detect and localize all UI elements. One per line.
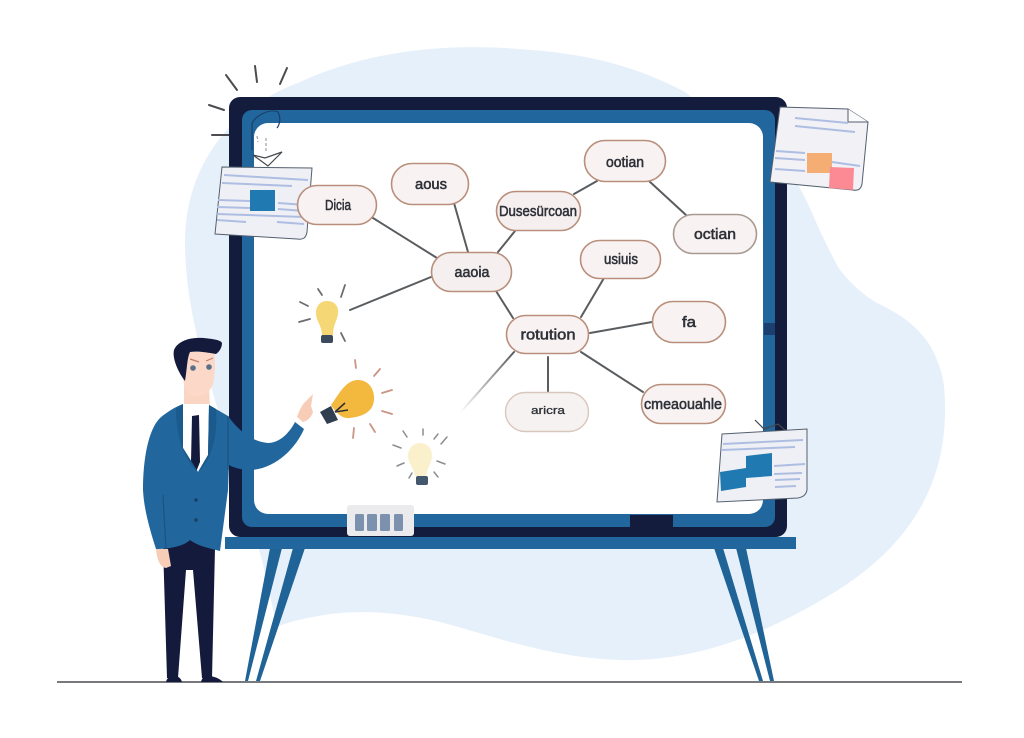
connector lines: [350, 181, 686, 413]
node: Data: Dicia: [325, 197, 352, 214]
node: middle upper: [496, 192, 580, 230]
node: Data: [298, 186, 376, 224]
icon: pale bulb: [393, 429, 447, 485]
tie: [191, 415, 200, 472]
whiteboard frame: [229, 97, 787, 537]
node: middle right: usiuis: [604, 251, 638, 268]
eyes: [190, 364, 212, 371]
node: top left: [392, 164, 468, 204]
pointing hand: [297, 394, 313, 422]
node: far right: octian: [694, 226, 736, 243]
node: lower right: cmeaouahle: [644, 396, 722, 413]
trousers: [163, 540, 215, 678]
node: solution hub: rotution: [520, 326, 576, 344]
whiteboard stand legs: [245, 548, 774, 681]
node: lower right: [642, 384, 726, 424]
node: short right: fa: [682, 314, 697, 331]
character: presenter: [143, 338, 313, 682]
sparkle lines near board corner: [209, 66, 287, 135]
ground line: [57, 681, 962, 683]
icon: small yellow bulb: [299, 285, 345, 343]
node: center: aaoia: [454, 264, 490, 281]
marker tray: [347, 505, 414, 536]
eyebrows: [190, 358, 213, 362]
node: faded lower: [506, 392, 588, 432]
node: far right: [674, 214, 756, 254]
jacket lapels: [176, 404, 216, 472]
note: top right: [770, 107, 868, 190]
node: center: [432, 252, 512, 292]
node: middle right: [580, 240, 660, 278]
shirt: [183, 404, 210, 475]
jacket: [143, 404, 304, 551]
node: faded lower: aricra: [531, 405, 566, 417]
note: top left with clip: [215, 111, 312, 239]
shoes: [166, 676, 223, 682]
node: top right: [584, 140, 666, 182]
hair: [174, 338, 222, 381]
node: middle upper: Dusesürcoan: [499, 203, 577, 220]
node: solution hub: [506, 316, 588, 354]
left hand: [156, 549, 171, 568]
neck and face: [184, 385, 210, 408]
node: top left: aous: [415, 176, 447, 193]
jacket buttons: [194, 498, 198, 522]
jacket seam: [163, 416, 228, 549]
background blob: [185, 47, 945, 660]
icon: large orange bulb: [320, 360, 392, 438]
node: short right: [652, 302, 726, 342]
node: top right: ootian: [606, 154, 644, 171]
note: lower right: [717, 420, 807, 502]
board shelf: [225, 537, 796, 549]
